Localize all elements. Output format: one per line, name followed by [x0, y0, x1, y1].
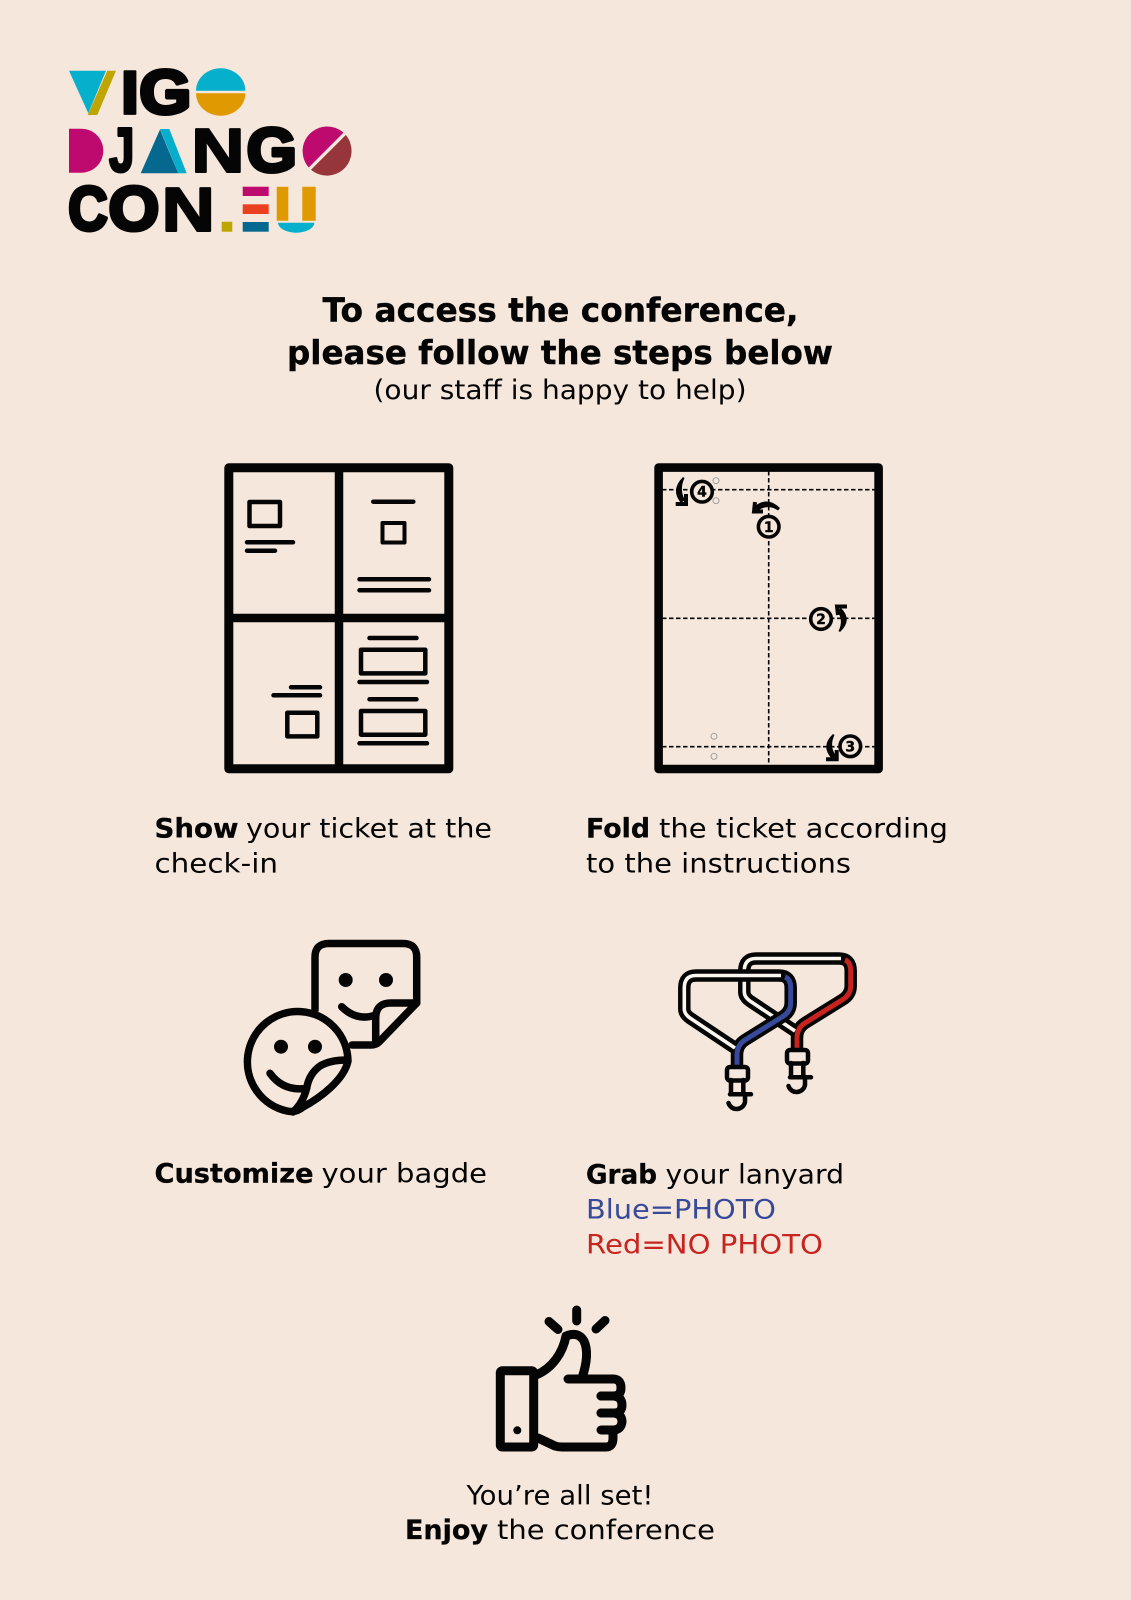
caption: show: Show — [154, 814, 238, 844]
logo row: VIGO: I — [120, 59, 140, 128]
caption: all set: Enjoy — [405, 1515, 488, 1546]
step 5: enjoy — [405, 1310, 715, 1546]
caption: all set: the conference — [497, 1515, 715, 1546]
icon: folding instructions — [659, 468, 879, 769]
caption: grab: your lanyard — [666, 1160, 844, 1190]
logo row: CON.EU: O — [109, 175, 159, 244]
logo row: CON.EU: N — [162, 176, 215, 245]
icon: red lanyard — [744, 958, 851, 1092]
caption: customize: your bagde — [322, 1158, 487, 1190]
caption: fold: to the instructions — [586, 848, 851, 880]
caption: all set: You’re all set! — [465, 1480, 654, 1512]
step 4: grab lanyard — [586, 958, 851, 1260]
fold mark 3 — [826, 734, 861, 759]
logo row: DJANGO — [69, 116, 352, 186]
caption: grab: Red=NO PHOTO — [586, 1230, 823, 1260]
logo row: DJANGO: G — [247, 116, 297, 185]
caption: customize: Customize — [154, 1158, 314, 1190]
step 3: customize badge — [154, 944, 487, 1190]
heading — [287, 290, 833, 406]
fold mark 2 — [811, 606, 847, 632]
icon: round sticker — [247, 1012, 348, 1112]
caption: show — [154, 814, 492, 880]
step 1: show ticket — [154, 467, 492, 880]
heading note: (our staff is happy to help) — [374, 375, 746, 406]
caption: fold: Fold — [586, 814, 650, 844]
caption: grab: Blue=PHOTO — [586, 1194, 776, 1226]
heading line 2: please follow the steps below — [287, 333, 833, 372]
step 2: fold ticket — [586, 468, 948, 880]
caption: grab — [586, 1160, 844, 1260]
logo row: DJANGO: J — [109, 116, 134, 186]
caption: grab: Grab — [586, 1160, 657, 1190]
fold mark 1: 1 — [764, 520, 774, 536]
logo row: DJANGO: N — [191, 117, 245, 186]
caption: show: check-in — [154, 848, 278, 880]
icon: thumbs up — [500, 1310, 622, 1447]
logo row: CON.EU — [68, 175, 316, 245]
caption: show: your ticket at the — [246, 814, 492, 844]
logo row: VIGO: G — [139, 58, 191, 127]
fold mark 4 — [676, 477, 712, 504]
icon: square sticker — [315, 944, 417, 1045]
icon: ticket layout — [228, 467, 449, 769]
icon: blue lanyard — [684, 976, 791, 1109]
fold mark 4: 4 — [697, 485, 707, 501]
fold mark 2: 2 — [816, 612, 826, 628]
logo row: CON.EU: C — [68, 175, 108, 244]
logo: Vigo DjangoCon.eu — [68, 58, 352, 245]
fold mark 1 — [754, 501, 780, 537]
caption: all set — [405, 1480, 715, 1546]
caption: fold: the ticket according — [659, 814, 948, 844]
caption: customize — [154, 1158, 487, 1190]
heading line 1: To access the conference, — [322, 290, 798, 330]
logo row: VIGO — [69, 58, 245, 128]
caption: fold — [586, 814, 948, 880]
fold mark 3: 3 — [845, 739, 855, 755]
